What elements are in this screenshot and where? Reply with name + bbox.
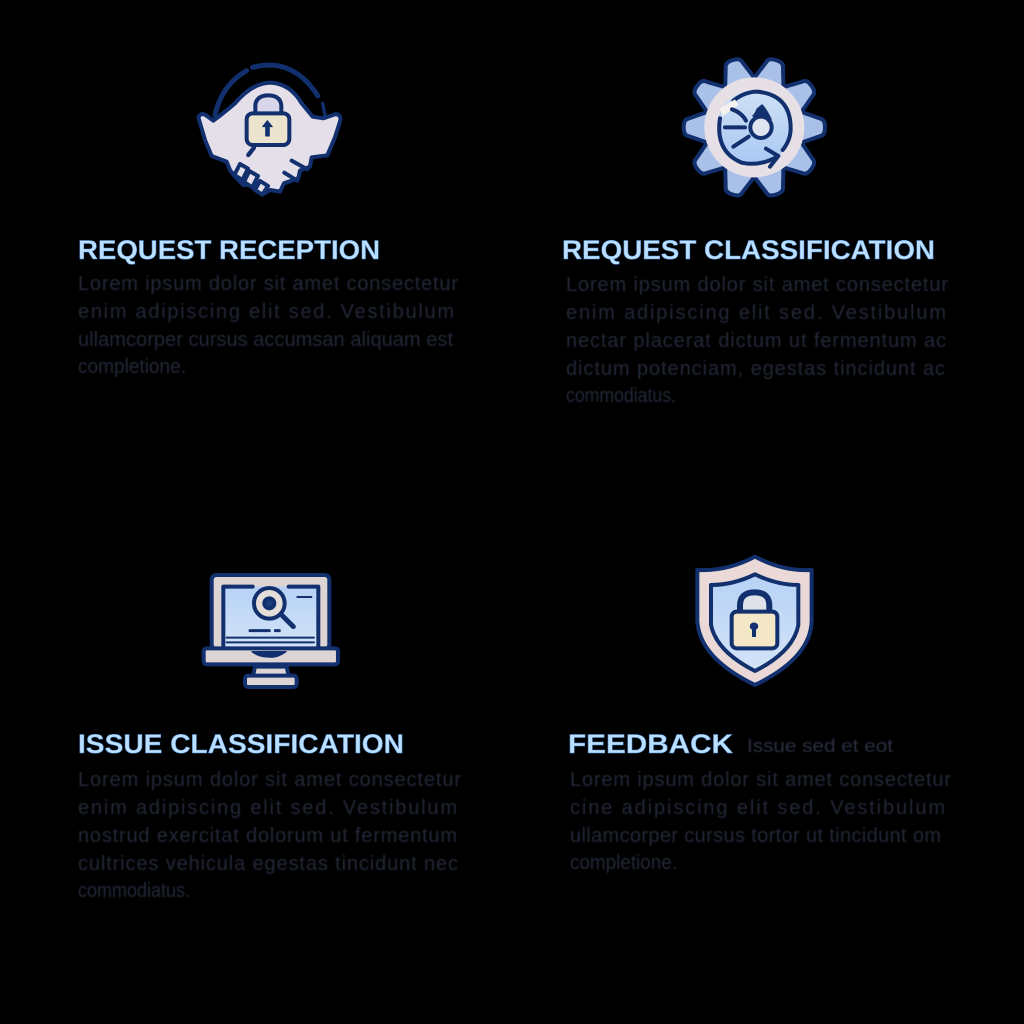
text block: issue classification: nostrud exercitat dolorum ut fermentum (78, 825, 457, 847)
text block: request classification: Lorem ipsum dolor sit amet consectetur (566, 274, 948, 296)
text block: issue classification: cultrices vehicula egestas tincidunt nec (78, 853, 458, 875)
icon: shield with padlock (697, 557, 812, 685)
text block: feedback: completione. (570, 852, 677, 874)
icon: gear with cycle and flame (684, 55, 825, 200)
text block: request classification: nectar placerat dictum ut fermentum ac (566, 330, 946, 352)
panel: request classification (562, 55, 948, 407)
text block: request reception: Lorem ipsum dolor sit amet consectetur (78, 273, 458, 295)
panel: issue classification (78, 575, 461, 902)
text block: feedback: ullamcorper cursus tortor ut tincidunt om (570, 825, 941, 847)
text block: request classification (566, 274, 948, 407)
icon: laptop with magnifier (204, 575, 338, 687)
text block: feedback: Lorem ipsum dolor sit amet consectetur (570, 769, 951, 791)
text block: request reception: enim adipiscing elit sed. Vestibulum (78, 301, 454, 323)
panel: request reception (78, 65, 458, 378)
text block: request classification: dictum potenciam, egestas tincidunt ac (566, 358, 945, 380)
text block: issue classification: Lorem ipsum dolor sit amet consectetur (78, 769, 461, 791)
panel: feedback (568, 557, 951, 874)
text block: feedback (570, 769, 951, 874)
text block: feedback: cine adipiscing elit sed. Vestibulum (570, 797, 945, 819)
icon: handshake with padlock (198, 65, 340, 195)
text block: issue classification: commodiatus. (78, 880, 190, 902)
text block: issue classification (78, 769, 461, 902)
text block: request reception: completione. (78, 356, 186, 378)
text block: request classification: enim adipiscing elit sed. Vestibulum (566, 302, 946, 324)
text block: issue classification: enim adipiscing elit sed. Vestibulum (78, 797, 457, 819)
text block: request reception (78, 273, 458, 378)
text block: request classification: commodiatus. (566, 385, 676, 407)
text block: request reception: ullamcorper cursus accumsan aliquam est (78, 329, 453, 351)
heading: feedback: FEEDBACK (568, 729, 734, 759)
heading: request classification: REQUEST CLASSIFICATION (562, 235, 935, 265)
heading: request reception: REQUEST RECEPTION (78, 235, 380, 265)
heading: issue classification: ISSUE CLASSIFICATION (78, 729, 404, 759)
subheading: feedback note: Issue sed et eot (747, 736, 893, 756)
